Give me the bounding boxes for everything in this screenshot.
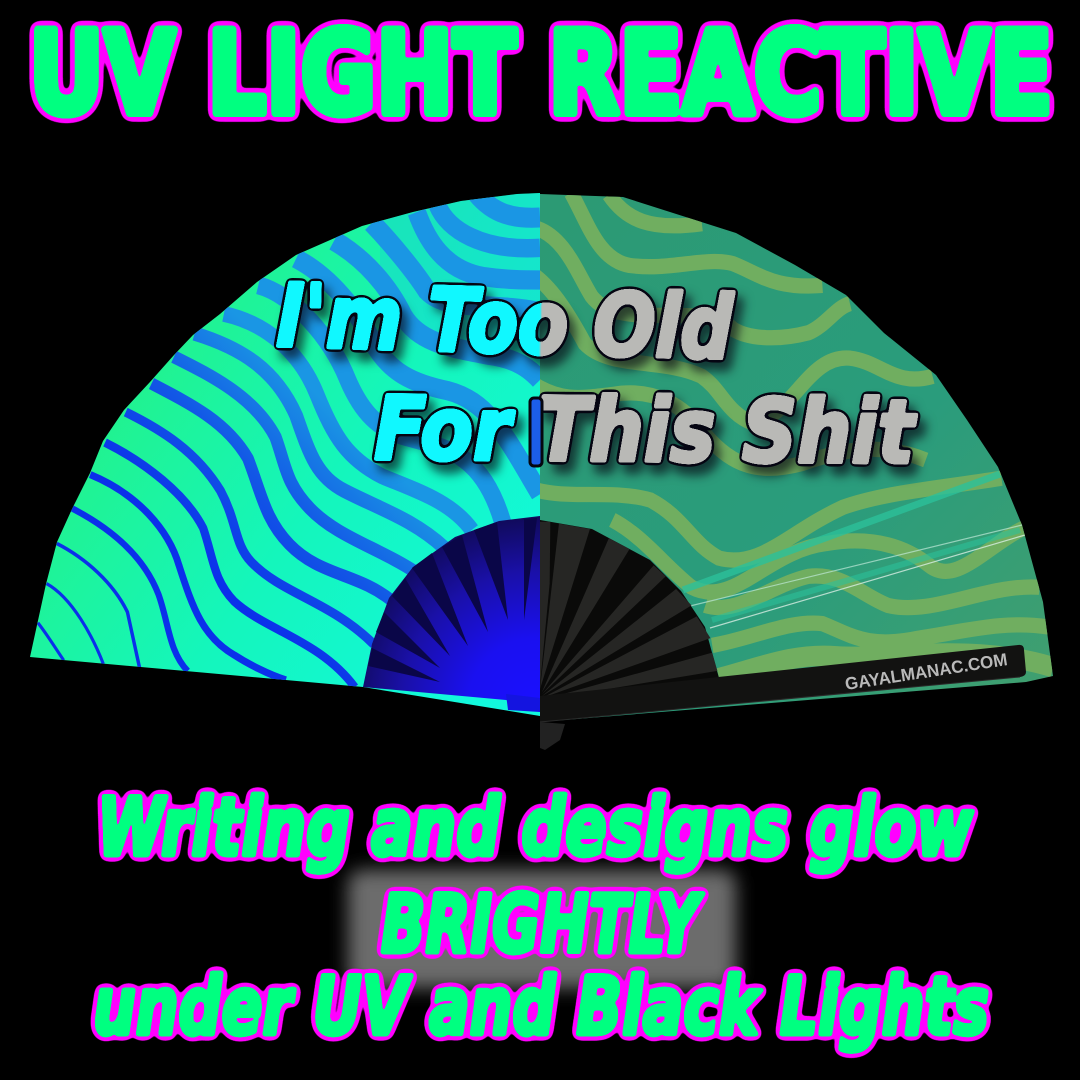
panel: fan right half in normal light [533, 193, 1053, 750]
fan handle stick with URL [540, 645, 1026, 750]
blue sliver of the letter T [530, 398, 542, 466]
caption [93, 781, 989, 1053]
caption line 2: BRIGHTLY [381, 878, 704, 971]
fan ribs right [540, 520, 719, 722]
fan handle stick with URL: GAYALMANAC.COM [844, 649, 1009, 694]
panel: fan left half under UV light [30, 187, 540, 716]
glow behind BRIGHTLY [348, 870, 736, 988]
fan illustration [30, 187, 1053, 750]
slogan line 1: I'm Too Old [275, 264, 735, 380]
fan slogan [275, 264, 917, 484]
fan handle left [506, 694, 540, 712]
fan ribs left [363, 516, 540, 712]
slogan line 2: For This Shit [374, 377, 917, 484]
